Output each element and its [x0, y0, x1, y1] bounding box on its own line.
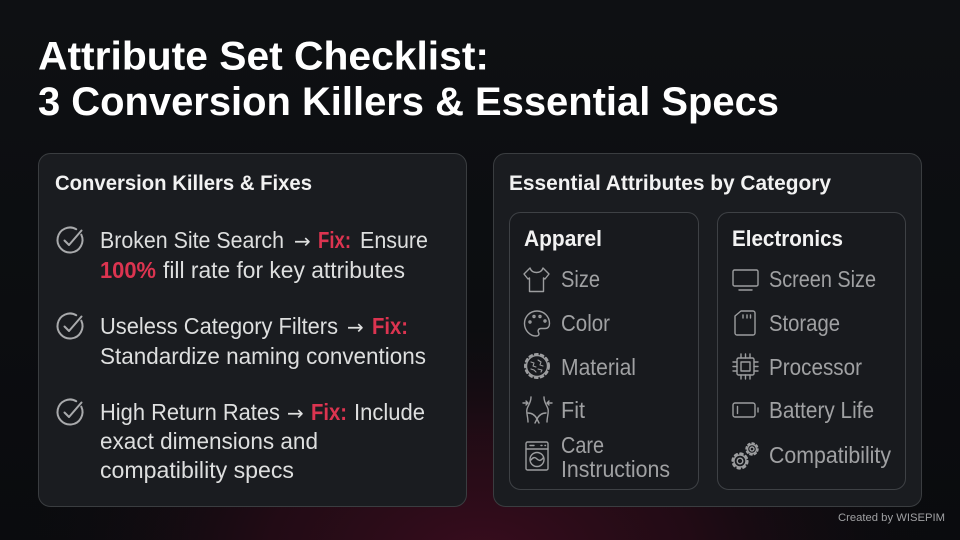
card: apparel — [510, 212, 698, 490]
item: high return rates: High Return Rates — [100, 399, 280, 425]
title — [38, 34, 779, 124]
item: high return rates: Include — [354, 399, 425, 425]
label: screen size: Screen Size — [769, 266, 876, 292]
item: high return rates: compatibility specs — [100, 457, 294, 483]
title: Attribute Set Checklist: — [38, 34, 489, 78]
item: useless category filters: → — [347, 315, 364, 339]
item: useless category filters: Standardize naming conventions — [100, 343, 426, 369]
icon: waist fit — [523, 397, 552, 423]
label: size: Size — [561, 266, 600, 292]
item: high return rates: Fix: — [311, 399, 347, 425]
item: broken site search: fill rate for key attributes — [163, 257, 405, 283]
card: electronics — [718, 212, 906, 490]
item: broken site search: Fix: — [318, 227, 351, 253]
panel: conversion killers and fixes — [38, 154, 466, 506]
icon: monitor — [733, 270, 758, 290]
icon: t-shirt — [524, 268, 549, 292]
heading: apparel: Apparel — [524, 226, 602, 251]
label: compatibility: Compatibility — [769, 442, 891, 468]
heading: essential attributes: Essential Attributes by Category — [509, 171, 831, 195]
label: color: Color — [561, 310, 610, 336]
icon: memory card — [735, 311, 755, 335]
item: high return rates: exact dimensions and — [100, 428, 318, 454]
item: broken site search — [57, 227, 428, 283]
heading: electronics: Electronics — [732, 226, 843, 251]
label: fit: Fit — [561, 397, 585, 423]
icon: battery — [733, 403, 758, 417]
item: broken site search: → — [294, 229, 311, 253]
panel: essential attributes by category — [494, 154, 922, 506]
credit: Created by WISEPIM — [838, 512, 945, 524]
label: care instructions: Care — [561, 432, 604, 458]
icon: check circle — [57, 314, 82, 339]
item: high return rates — [57, 399, 425, 483]
card: apparel: Instructions — [561, 456, 670, 482]
label: battery life: Battery Life — [769, 397, 874, 423]
icon: processor — [733, 354, 758, 379]
heading: conversion killers: Conversion Killers & Fixes — [55, 171, 312, 195]
item: broken site search: Ensure — [360, 227, 428, 253]
icon: check circle — [57, 400, 82, 425]
item: broken site search: Broken Site Search — [100, 227, 284, 253]
title: 3 Conversion Killers & Essential Specs — [38, 80, 779, 124]
label: processor: Processor — [769, 354, 862, 380]
label: storage: Storage — [769, 310, 840, 336]
item: high return rates: → — [287, 401, 304, 425]
item: useless category filters: Useless Category Filters — [100, 313, 338, 339]
icon: gears — [732, 443, 758, 468]
icon: check circle — [57, 228, 82, 253]
label: material: Material — [561, 354, 636, 380]
item: useless category filters: Fix: — [372, 313, 408, 339]
icon: washing machine — [526, 442, 548, 470]
icon: material gear — [525, 354, 549, 378]
item: broken site search: 100% — [100, 257, 156, 283]
item: useless category filters — [57, 313, 426, 369]
icon: palette — [524, 311, 550, 336]
